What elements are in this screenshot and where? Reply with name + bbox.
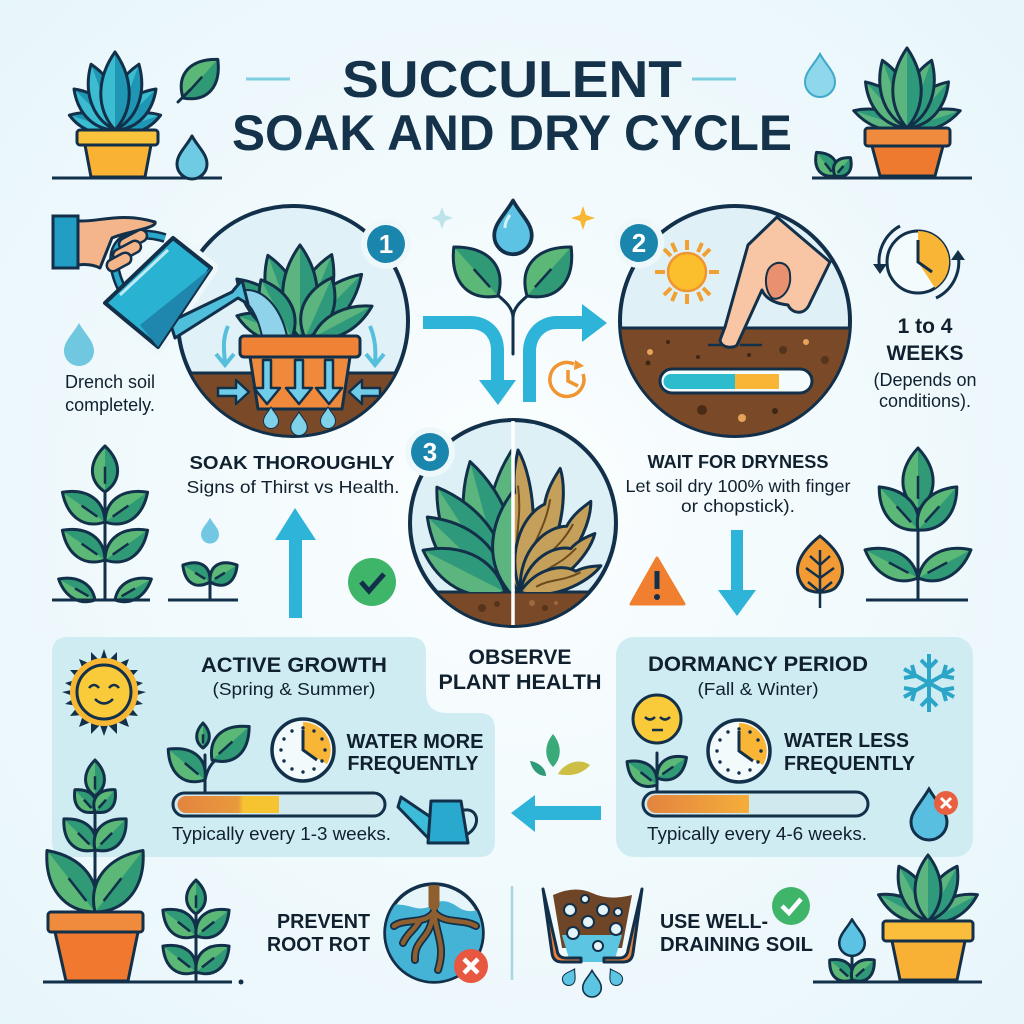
succulent in pot xyxy=(226,245,377,350)
snowflake xyxy=(904,654,954,712)
cuff xyxy=(53,216,78,268)
icon: water drop top left xyxy=(177,136,207,179)
side flow arrows xyxy=(216,326,234,365)
icon: leaf top left xyxy=(171,49,229,109)
water stream xyxy=(243,290,287,336)
smiling sun xyxy=(62,649,146,736)
arrow: step 1 down to step 3 xyxy=(423,316,516,405)
text: wait for dryness: WAIT FOR DRYNESS xyxy=(648,451,828,472)
clock xyxy=(708,720,770,782)
text: soak thoroughly: SOAK THOROUGHLY xyxy=(190,452,395,473)
icon: root rot xyxy=(380,884,490,990)
subheading: (Fall & Winter) xyxy=(698,679,818,699)
icon: tall plant right xyxy=(859,448,977,600)
text: prevent root rot: PREVENT xyxy=(277,911,370,933)
text: observe plant health: PLANT HEALTH xyxy=(438,671,602,694)
title xyxy=(232,51,792,161)
icon: tall plant left xyxy=(52,446,156,608)
text: 1 to 4 weeks: conditions). xyxy=(879,391,971,411)
icon: small sprout top right xyxy=(809,147,857,182)
text: wait for dryness: Let soil dry 100% with finger xyxy=(626,476,851,496)
panel: dormancy xyxy=(616,637,973,857)
healthy half xyxy=(422,448,512,592)
sleepy face xyxy=(633,695,681,743)
text: drench soil xyxy=(65,372,155,415)
finger xyxy=(720,217,830,347)
dry half xyxy=(514,448,602,592)
icon: orange clock xyxy=(550,360,584,396)
icon: watering can and hand xyxy=(53,216,248,347)
divider xyxy=(511,886,513,980)
icon: orange leaf xyxy=(797,536,843,608)
title: SOAK AND DRY CYCLE xyxy=(232,105,792,161)
icon: water drop top right xyxy=(805,54,835,97)
icon: drop sprout bottom right xyxy=(823,919,881,987)
icon: potted succulent bottom right xyxy=(813,855,982,982)
panel: step 1 soak xyxy=(170,206,420,443)
icon: potted blue succulent top left xyxy=(52,52,222,178)
heading: ACTIVE GROWTH xyxy=(201,654,387,677)
text: drench soil: Drench soil xyxy=(65,372,155,392)
icon: small plant bottom xyxy=(156,880,236,982)
badge 2: 2 xyxy=(632,228,646,258)
icon: central water drop xyxy=(494,200,532,254)
text: prevent root rot: ROOT ROT xyxy=(267,934,370,956)
water less frequently: WATER LESS xyxy=(784,730,909,752)
orange pot xyxy=(240,336,360,409)
water drop with x xyxy=(911,789,958,840)
icon: sparkles xyxy=(431,206,595,230)
progress bar xyxy=(643,792,868,816)
typically text: Typically every 1-3 weeks. xyxy=(172,824,391,844)
text: soak thoroughly xyxy=(186,452,400,497)
progress bar xyxy=(173,793,385,816)
clock xyxy=(272,719,334,781)
text: drench soil: completely. xyxy=(65,395,155,415)
moisture bar xyxy=(660,369,812,393)
panel: active growth xyxy=(52,637,495,857)
text: 1 to 4 weeks: (Depends on xyxy=(873,370,977,390)
text: use well-draining soil: USE WELL- xyxy=(660,911,768,933)
text: wait for dryness: or chopstick). xyxy=(681,496,795,516)
icon: central sprout xyxy=(439,234,586,354)
text: 1 to 4 weeks: WEEKS xyxy=(886,342,964,365)
hand xyxy=(78,218,155,268)
small sprout xyxy=(620,749,692,793)
panel: dormancy: FREQUENTLY xyxy=(784,753,916,775)
panel: active growth: FREQUENTLY xyxy=(348,753,479,775)
badge 3: 3 xyxy=(423,437,437,467)
sprout xyxy=(159,716,259,792)
icon: green check xyxy=(348,558,396,606)
arrow: up to step 2 xyxy=(523,304,607,402)
heading: DORMANCY PERIOD xyxy=(648,653,868,676)
icon: warning triangle xyxy=(631,558,684,604)
subheading: (Spring & Summer) xyxy=(212,679,376,699)
badge 3 xyxy=(405,427,455,477)
arrow: down xyxy=(718,530,756,616)
icon: sprout with drop xyxy=(168,518,243,600)
text: use well-draining soil: DRAINING SOIL xyxy=(660,934,813,956)
panel: step 3 observe xyxy=(405,420,625,632)
icon: green check small xyxy=(772,887,810,925)
downward water arrows xyxy=(218,360,380,404)
arrow: left xyxy=(511,795,601,832)
icon: large potted plant bottom left xyxy=(33,760,244,984)
icon: water drop left xyxy=(64,323,94,366)
title: SUCCULENT xyxy=(342,51,682,109)
typically text: Typically every 4-6 weeks. xyxy=(647,824,867,844)
panel: step 2 wait xyxy=(620,206,850,443)
badge 1: 1 xyxy=(379,229,393,259)
text: observe plant health xyxy=(438,646,602,694)
text: soak thoroughly: Signs of Thirst vs Health. xyxy=(186,477,400,497)
drips xyxy=(264,407,336,436)
sun xyxy=(655,240,719,304)
icon: small leaf trio xyxy=(530,734,590,776)
text: 1 to 4 weeks: 1 to 4 xyxy=(898,315,953,338)
watering can xyxy=(398,797,477,843)
arrow: up xyxy=(275,508,316,618)
badge 1 xyxy=(361,219,411,269)
icon: potted orange succulent top right xyxy=(812,48,972,178)
text: use well-draining soil xyxy=(660,911,813,956)
text: prevent root rot xyxy=(267,911,370,956)
text: wait for dryness xyxy=(626,451,851,516)
water more frequently: WATER MORE xyxy=(346,731,484,753)
text: 1 to 4 weeks xyxy=(873,315,977,411)
icon: well-draining soil xyxy=(543,889,642,997)
text: observe plant health: OBSERVE xyxy=(468,646,572,669)
badge 2 xyxy=(614,218,664,268)
icon: timer clock xyxy=(873,226,965,298)
